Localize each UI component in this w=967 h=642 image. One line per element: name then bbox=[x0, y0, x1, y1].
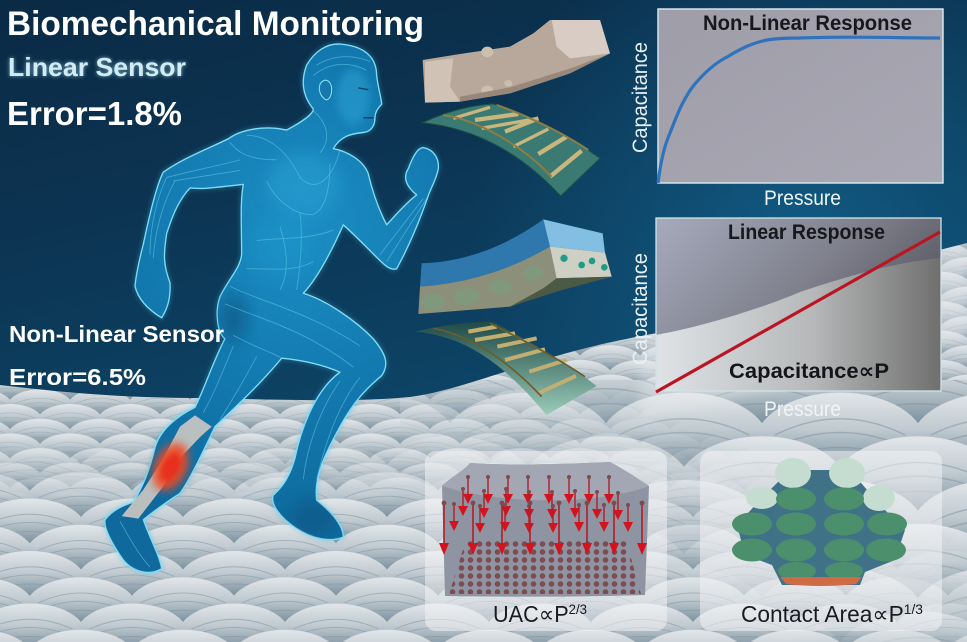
frosted panel bbox=[425, 451, 667, 631]
panel label: UAC∝P bbox=[493, 601, 573, 627]
green contact discs bbox=[732, 488, 907, 580]
non-linear sensor error value: Error=6.5% bbox=[9, 364, 146, 390]
chart border bbox=[656, 218, 941, 391]
linear sensor error value: Error=1.8% bbox=[7, 95, 182, 132]
electrode sheet one bbox=[423, 104, 600, 196]
panel label: 1/3 bbox=[904, 601, 923, 617]
blue porous core bbox=[737, 470, 905, 585]
ear bbox=[319, 80, 332, 100]
electrode sheet two bbox=[415, 322, 597, 415]
chart title: Non-Linear Response bbox=[703, 12, 912, 35]
linear sensor label: Linear Sensor bbox=[8, 52, 186, 82]
material sample: top porous block bbox=[423, 20, 610, 103]
y axis label: Capacitance bbox=[629, 253, 652, 365]
frosted panel bbox=[700, 451, 942, 631]
block top surface bbox=[442, 462, 649, 500]
face detail bbox=[358, 88, 373, 118]
runner figure bbox=[105, 44, 438, 572]
red pressure arrows bbox=[439, 475, 647, 555]
body highlights bbox=[220, 69, 370, 535]
chart title: Linear Response bbox=[728, 221, 885, 244]
y axis label: Capacitance bbox=[629, 42, 652, 153]
panel: UAC scaling bbox=[425, 451, 667, 631]
gray block bbox=[442, 462, 649, 597]
non-linear sensor label: Non-Linear Sensor bbox=[9, 321, 224, 347]
blue saturation curve bbox=[658, 37, 940, 183]
proportionality label: Capacitance∝P bbox=[729, 360, 889, 383]
orange base layer bbox=[780, 577, 862, 586]
fabric landscape of knitted bumps bbox=[0, 230, 967, 642]
panel: contact area scaling bbox=[700, 451, 942, 631]
title: Biomechanical Monitoring bbox=[7, 5, 424, 43]
panel label: Contact Area∝P bbox=[741, 601, 906, 627]
injury glow bbox=[145, 437, 196, 497]
panel label: 2/3 bbox=[569, 601, 587, 617]
runner body silhouette bbox=[105, 44, 438, 572]
chart area bbox=[658, 9, 943, 183]
linear sensor label: Linear Sensor bbox=[8, 52, 186, 82]
muscle contour lines bbox=[120, 57, 427, 567]
runner outer glow bbox=[105, 44, 438, 572]
x axis label: Pressure bbox=[764, 398, 841, 421]
chart area bbox=[656, 218, 941, 391]
particle floor bbox=[449, 540, 641, 594]
chart: linear response bbox=[629, 218, 941, 421]
red linear line bbox=[656, 232, 940, 392]
x axis label: Pressure bbox=[764, 187, 841, 210]
fabric hill seen through the chart bbox=[656, 258, 941, 391]
top translucent discs bbox=[746, 458, 895, 511]
chart: non-linear response bbox=[629, 9, 943, 210]
material sample: blue-coated foam bbox=[418, 219, 612, 314]
exposed leg bone bbox=[122, 415, 212, 519]
